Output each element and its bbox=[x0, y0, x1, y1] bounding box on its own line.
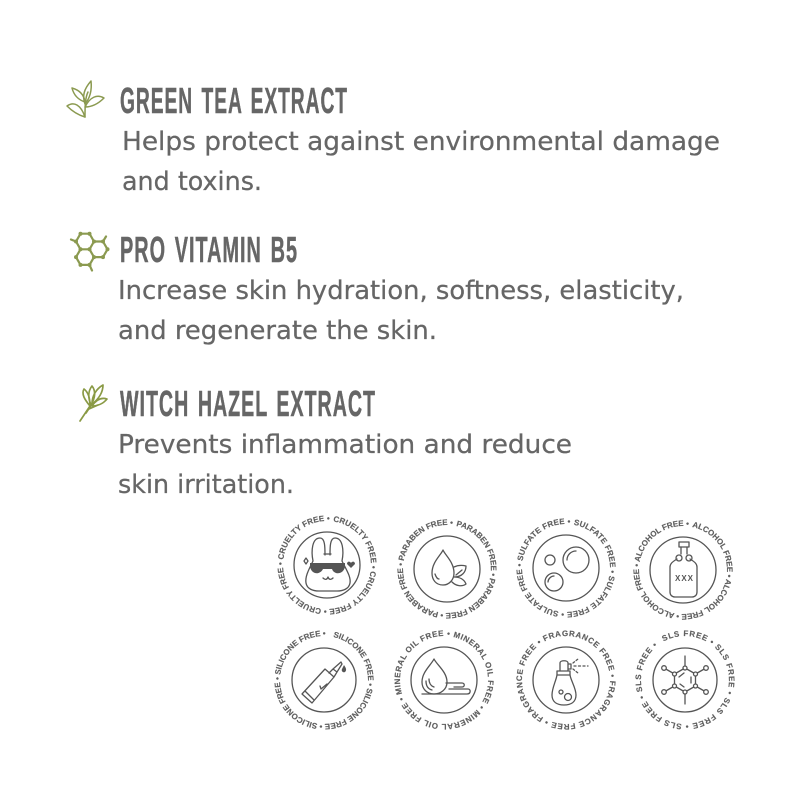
badge: paraben free: PARABEN FREE • PARABEN FREE • PARABEN FREE • PARABEN FREE • bbox=[397, 519, 497, 619]
text: green tea description: Helps protect against environmental damage bbox=[122, 127, 720, 157]
icon: silicone tube bbox=[302, 662, 346, 703]
heading: witch hazel extract: WITCH HAZEL EXTRACT bbox=[120, 383, 376, 424]
section: pro vitamin b5 bbox=[71, 229, 684, 346]
text: pro vitamin description bbox=[118, 276, 684, 346]
badge: sulfate free: SULFATE FREE • SULFATE FREE • SULFATE FREE • SULFATE FREE • bbox=[516, 518, 616, 618]
text: witch hazel description bbox=[118, 430, 572, 500]
text: pro vitamin description: and regenerate the skin. bbox=[118, 316, 437, 346]
badge: mineral oil free: MINERAL OIL FREE • MINERAL OIL FREE • MINERAL OIL FREE • bbox=[394, 630, 494, 730]
icon: drop with leaves bbox=[432, 550, 466, 586]
badge: alcohol free: ALCOHOL FREE • ALCOHOL FREE • ALCOHOL FREE • ALCOHOL FREE • bbox=[633, 520, 733, 620]
badge: fragrance free: FRAGRANCE FREE • FRAGRANCE FREE • FRAGRANCE FREE • bbox=[516, 630, 616, 730]
section: witch hazel extract bbox=[80, 383, 572, 500]
icon: molecule bbox=[662, 656, 708, 704]
text: pro vitamin description: Increase skin hydration, softness, elasticity, bbox=[118, 276, 684, 306]
text: green tea description bbox=[122, 127, 720, 197]
icon: witch hazel sprig bbox=[80, 385, 107, 421]
badge: cruelty free: CRUELTY FREE • CRUELTY FREE • CRUELTY FREE • CRUELTY FREE • bbox=[278, 516, 376, 615]
text: green tea description: and toxins. bbox=[122, 167, 262, 197]
section: green tea extract bbox=[67, 80, 720, 197]
icon: bubbles bbox=[545, 547, 589, 591]
icon: hexagon molecule bbox=[71, 232, 110, 270]
heading: green tea extract: GREEN TEA EXTRACT bbox=[120, 80, 348, 121]
badge: silicone free: SILICONE FREE • SILICONE FREE • SILICONE FREE • SILICONE FREE • bbox=[274, 630, 374, 730]
icon: perfume bottle bbox=[552, 659, 588, 705]
icon: bunny with sunglasses bbox=[304, 538, 355, 591]
text: witch hazel description: Prevents inflammation and reduce bbox=[118, 430, 572, 460]
heading: pro vitamin b5: PRO VITAMIN B5 bbox=[120, 229, 298, 270]
badge: sls free: SLS FREE • SLS FREE • SLS FREE • SLS FREE • SLS FREE • bbox=[635, 630, 735, 730]
icon: tea leaves bbox=[67, 81, 104, 117]
icon: bottle: XXX bbox=[675, 574, 694, 583]
icon: oil drop bbox=[422, 659, 470, 694]
text: witch hazel description: skin irritation. bbox=[118, 470, 294, 500]
